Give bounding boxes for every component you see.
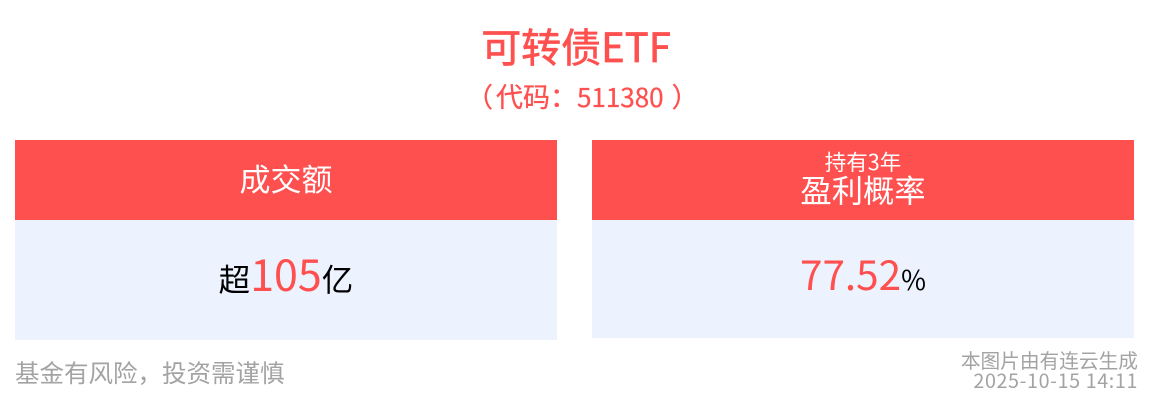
value: over 10.5 billion: 超105亿: [219, 242, 353, 304]
panel: turnover: [15, 140, 557, 340]
panel header: turnover: 成交额: [240, 155, 332, 200]
panel header: profit probability: [592, 140, 1134, 220]
header line: held 3 years: 持有3年: [825, 146, 901, 177]
header line: profit probability: 盈利概率: [800, 167, 926, 212]
generated-by note: [961, 345, 1138, 394]
panel: 3-year profit probability: [592, 140, 1134, 338]
generated-by note: 2025-10-15 14:11: [973, 365, 1138, 394]
value: 77.52%: 77.52%: [800, 243, 926, 302]
title: 可转债ETF: [481, 16, 671, 74]
risk disclaimer: 基金有风险，投资需谨慎: [15, 355, 284, 390]
panel header: turnover: [15, 140, 557, 220]
generated-by note: 本图片由有连云生成: [961, 345, 1138, 374]
subtitle: code: （代码：511380 ）: [466, 76, 699, 115]
